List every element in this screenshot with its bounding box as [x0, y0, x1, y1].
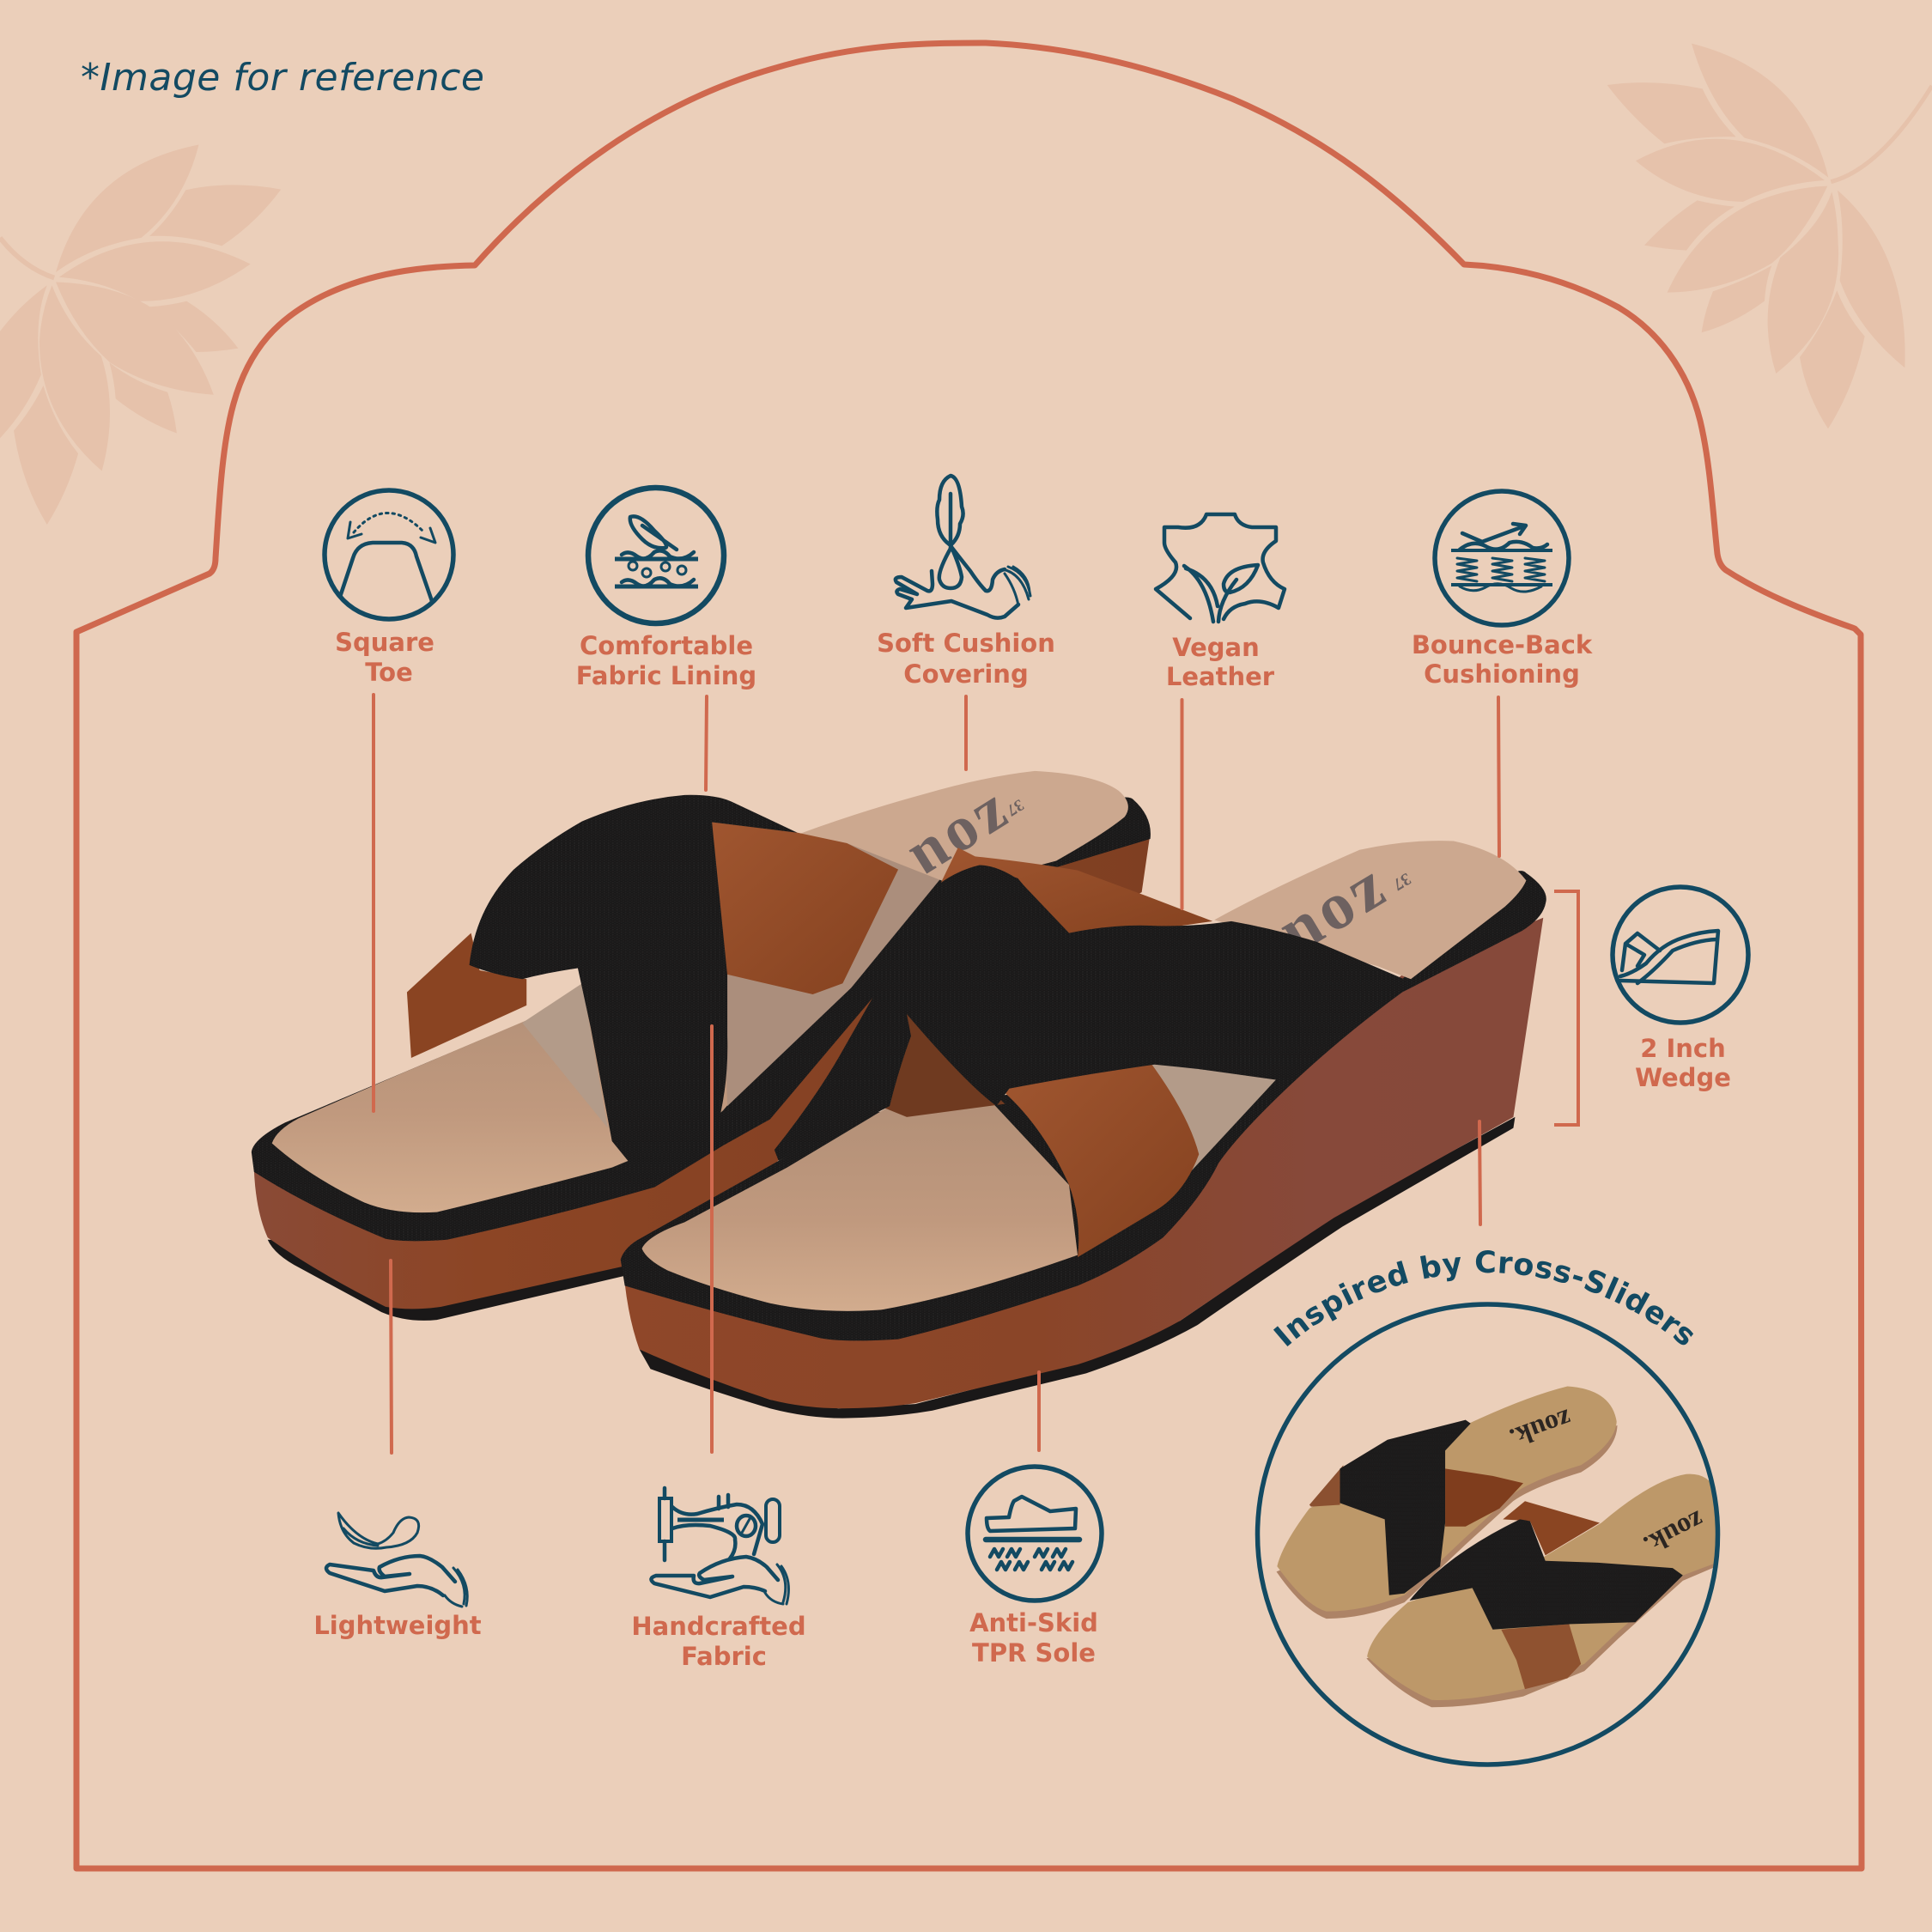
inset rear slider: [1277, 1386, 1618, 1619]
label: Comfortable Fabric Lining: Comfortable: [580, 631, 753, 660]
label: Square Toe: Toe: [365, 658, 413, 687]
front sandal: [621, 841, 1546, 1419]
reference note: *Image for reference: [81, 56, 484, 100]
icon: anti-skid sole: [968, 1467, 1102, 1601]
label: Soft Cushion Covering: Covering: [903, 659, 1029, 689]
inset rear slider: zouk.: [1506, 1403, 1576, 1454]
label: Vegan Leather: Vegan: [1172, 633, 1260, 662]
decorative flower: top left: [0, 145, 281, 525]
label: Comfortable Fabric Lining: Fabric Lining: [576, 661, 756, 690]
label: 2 Inch Wedge: Wedge: [1635, 1063, 1731, 1092]
icon: comfortable fabric lining: [588, 488, 724, 623]
wedge height bracket: [1554, 891, 1578, 1125]
main product photo: wedge sandals: [252, 771, 1546, 1419]
rear sandal: 37: [1003, 795, 1027, 819]
decorative flower: top right: [1607, 44, 1932, 428]
label: Handcrafted Fabric: Fabric: [681, 1642, 767, 1671]
label: Bounce-Back Cushioning: Cushioning: [1424, 659, 1580, 689]
icon: bounce-back cushioning: [1435, 491, 1569, 625]
rear sandal: zou: [896, 784, 1025, 901]
leader lines: [374, 695, 1499, 1453]
label: Handcrafted Fabric: Handcrafted: [631, 1612, 806, 1641]
label: Anti-Skid TPR Sole: Anti-Skid: [969, 1608, 1098, 1637]
icon: 2 inch wedge: [1613, 887, 1748, 1023]
icon: vegan leather: [1156, 514, 1285, 622]
label: Vegan Leather: Leather: [1166, 662, 1275, 691]
front sandal: 37: [1389, 869, 1414, 894]
icon: handcrafted sewing machine: [651, 1488, 788, 1604]
label: Lightweight: Lightweight: [313, 1611, 482, 1640]
inset: flat cross-slider photo: [1277, 1386, 1716, 1707]
inset ring: [1257, 1304, 1717, 1765]
icon: soft cushion covering: [896, 476, 1030, 618]
label: 2 Inch Wedge: 2 Inch: [1640, 1034, 1726, 1063]
icon: square toe: [325, 490, 453, 619]
inset front slider: zouk.: [1639, 1505, 1710, 1561]
inset heading: curved text: Inspired by Cross-Sliders: [1273, 1250, 1693, 1346]
label: Anti-Skid TPR Sole: TPR Sole: [972, 1638, 1096, 1668]
label: Soft Cushion Covering: Soft Cushion: [877, 629, 1055, 658]
front sandal: zou: [1268, 860, 1404, 982]
inset front slider: [1366, 1474, 1716, 1707]
label: Square Toe: Square: [335, 628, 434, 657]
rear sandal: [252, 771, 1151, 1321]
icon: lightweight: [326, 1513, 467, 1607]
label: Bounce-Back Cushioning: Bounce-Back: [1412, 630, 1593, 659]
